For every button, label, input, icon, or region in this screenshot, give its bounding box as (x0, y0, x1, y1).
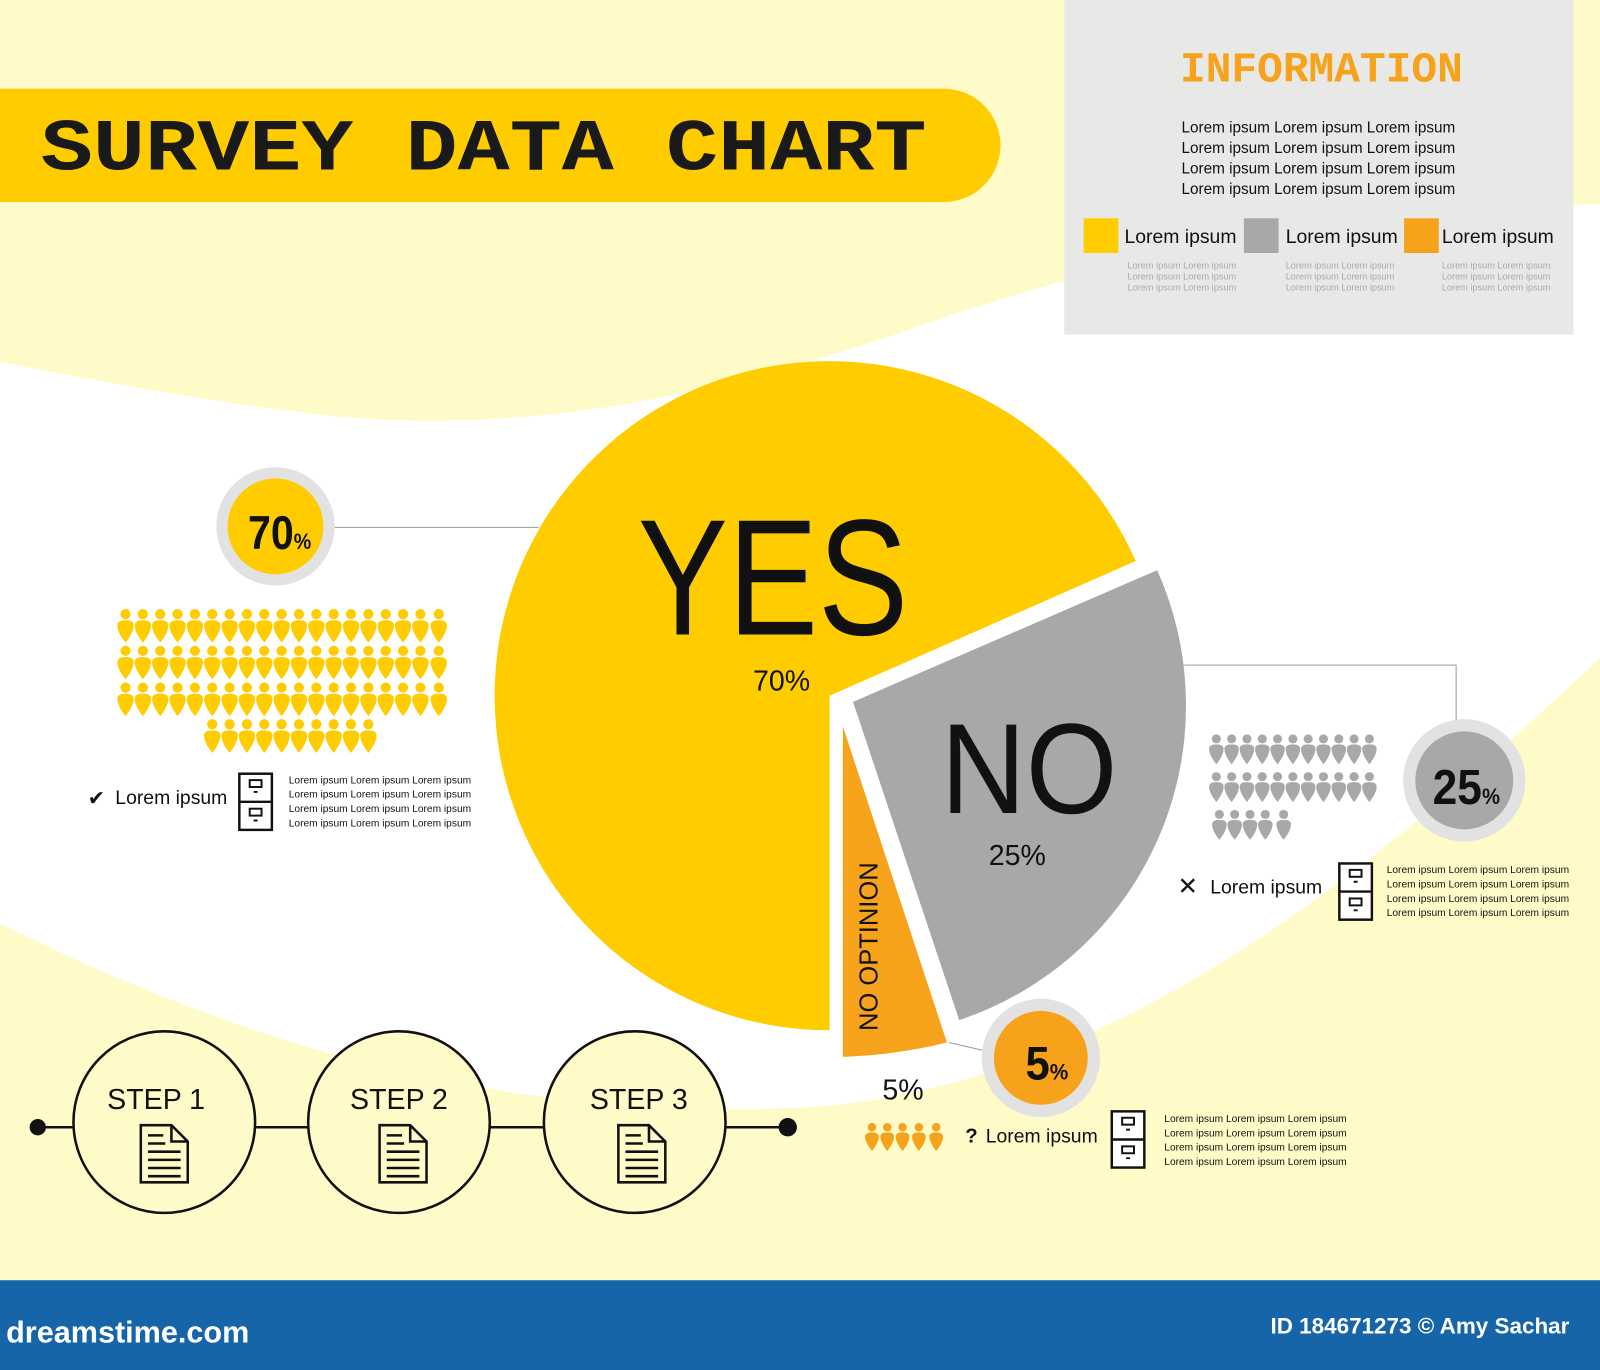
info text: Lorem ipsum Lorem ipsum Lorem ipsum (1181, 120, 1455, 137)
info text: Lorem ipsum Lorem ipsum Lorem ipsum (1181, 181, 1455, 198)
slice: no: NO (941, 698, 1117, 841)
label: 5%: 5% (882, 1075, 924, 1107)
people icons: no (1209, 734, 1377, 840)
info text: Lorem ipsum Lorem ipsum Lorem ipsum (1181, 140, 1455, 157)
note: no (1178, 863, 1569, 920)
footer: dreamstime.com (6, 1315, 249, 1349)
badge: 5% (982, 999, 1100, 1117)
legend: Lorem ipsum (1286, 226, 1398, 248)
badge: 70%: 70% (248, 507, 311, 559)
people icons: yes (117, 609, 447, 753)
note: no: Lorem ipsum Lorem ipsum Lorem ipsum (1387, 865, 1569, 876)
note: no: Lorem ipsum Lorem ipsum Lorem ipsum (1387, 894, 1569, 905)
legend: Lorem ipsum (1442, 226, 1554, 248)
slice: yes (495, 361, 1136, 1030)
badge: 5%: 5% (1026, 1037, 1068, 1089)
info text (1181, 120, 1455, 198)
footer (0, 1280, 1600, 1370)
panel: information (1064, 0, 1573, 335)
note: yes: Lorem ipsum Lorem ipsum Lorem ipsum (289, 804, 471, 815)
info heading: INFORMATION (1180, 46, 1463, 95)
note: no opinion: Lorem ipsum Lorem ipsum Lorem ipsum (1164, 1157, 1347, 1168)
legend: Lorem ipsum (1124, 226, 1236, 248)
step 1 (73, 1031, 255, 1213)
note: yes: Lorem ipsum (115, 787, 227, 809)
info text: Lorem ipsum Lorem ipsum Lorem ipsum (1181, 160, 1455, 177)
legend: Lorem ipsum Lorem ipsum (1286, 283, 1395, 293)
people icons: no opinion (865, 1123, 943, 1151)
note: yes: ✔ (88, 788, 105, 810)
legend: Lorem ipsum Lorem ipsum (1128, 283, 1236, 293)
step 2: STEP 2 (350, 1084, 448, 1116)
note: no: Lorem ipsum Lorem ipsum Lorem ipsum (1387, 879, 1569, 890)
step 3 (544, 1031, 726, 1213)
legend: Lorem ipsum Lorem ipsum (1286, 272, 1395, 282)
steps timeline (30, 1031, 797, 1213)
note: yes: Lorem ipsum Lorem ipsum Lorem ipsum (289, 790, 471, 801)
badge: 25% (1403, 719, 1526, 842)
step 3: STEP 3 (590, 1084, 688, 1116)
legend: Lorem ipsum Lorem ipsum (1128, 260, 1236, 270)
legend: Lorem ipsum Lorem ipsum (1442, 283, 1551, 293)
slice: yes: YES (638, 486, 908, 670)
note: no: Lorem ipsum (1210, 877, 1322, 899)
note: yes: Lorem ipsum Lorem ipsum Lorem ipsum (289, 818, 471, 829)
step 1: STEP 1 (107, 1084, 205, 1116)
note: no opinion: Lorem ipsum Lorem ipsum Lorem ipsum (1164, 1114, 1347, 1125)
note: no opinion (965, 1111, 1347, 1168)
badge: 25%: 25% (1433, 761, 1500, 815)
note: yes (88, 774, 471, 830)
slice: yes: 70% (753, 666, 810, 698)
note: no opinion: Lorem ipsum Lorem ipsum Lorem ipsum (1164, 1128, 1347, 1139)
slice: no: 25% (989, 840, 1046, 872)
footer: ID 184671273 © Amy Sachar (1270, 1313, 1570, 1338)
step 2 (308, 1031, 490, 1213)
title banner: SURVEY DATA CHART (41, 109, 927, 192)
note: no opinion: Lorem ipsum Lorem ipsum Lorem ipsum (1164, 1143, 1347, 1154)
note: no: ✕ (1178, 874, 1198, 901)
legend: Lorem ipsum Lorem ipsum (1128, 272, 1236, 282)
title banner (0, 89, 1001, 202)
legend: Lorem ipsum Lorem ipsum (1286, 260, 1395, 270)
badge: 70% (216, 467, 335, 586)
slice: no opinion (843, 726, 947, 1057)
legend: Lorem ipsum Lorem ipsum (1442, 272, 1551, 282)
legend: Lorem ipsum Lorem ipsum (1442, 260, 1551, 270)
connector lines (335, 527, 1456, 1051)
note: no opinion: ? (965, 1126, 978, 1148)
note: no opinion: Lorem ipsum (986, 1126, 1098, 1148)
note: no: Lorem ipsum Lorem ipsum Lorem ipsum (1387, 908, 1569, 919)
note: yes: Lorem ipsum Lorem ipsum Lorem ipsum (289, 775, 471, 786)
pie chart (495, 361, 1186, 1057)
legend (1084, 218, 1554, 293)
slice: no (853, 570, 1186, 1020)
slice: no opinion: NO OPTINION (856, 862, 884, 1031)
